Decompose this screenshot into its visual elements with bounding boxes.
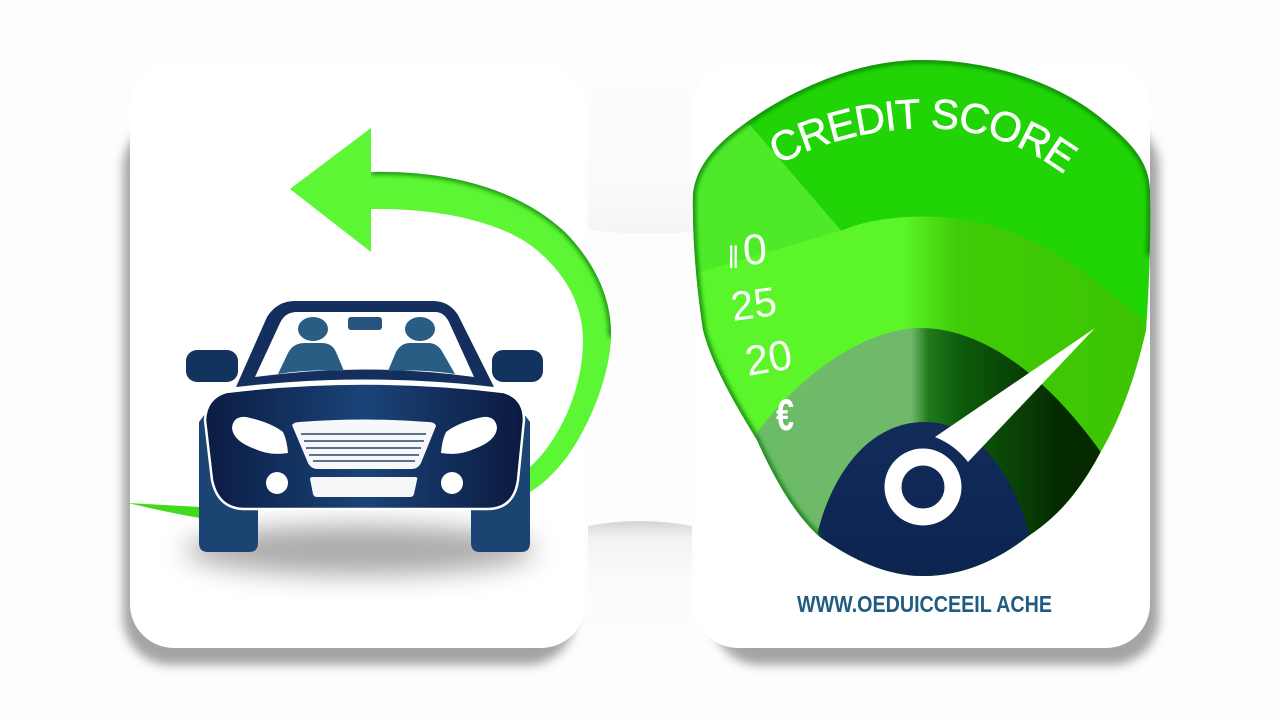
right wheel and fender [471, 414, 530, 552]
arrow head [290, 128, 371, 252]
right fog light [441, 472, 463, 494]
windshield [255, 312, 474, 377]
needle [935, 328, 1095, 462]
credit score gauge [692, 60, 1150, 576]
scale label euro: € [776, 391, 794, 440]
left occupant [278, 317, 344, 374]
left mirror [186, 350, 238, 382]
light wedge [692, 123, 841, 292]
number plate [310, 477, 417, 497]
infographic canvas [117, 60, 1165, 671]
scale tick mark: II [729, 240, 738, 276]
middle upper panel [588, 60, 692, 234]
hub ring [893, 457, 953, 517]
roof frame [236, 301, 494, 387]
right headlight [441, 417, 497, 454]
gauge shield [693, 60, 1150, 576]
grille [292, 420, 436, 469]
gauge hub [817, 422, 1030, 576]
website text: WWW.OEDUICCEEIL ACHE [797, 591, 1052, 617]
left wheel and fender [199, 414, 258, 552]
inner band [754, 328, 1100, 576]
scale label 25: 25 [728, 278, 779, 330]
middle band [690, 217, 1155, 600]
right mirror [492, 350, 543, 382]
shield edge shading [693, 60, 1150, 537]
gauge title: CREDIT SCORE [772, 98, 1078, 174]
right card [694, 62, 1159, 665]
scale label 20: 20 [741, 330, 796, 385]
rear-view mirror [348, 317, 382, 330]
left fog light [266, 472, 288, 494]
right occupant [388, 317, 455, 374]
car body [205, 384, 524, 509]
middle lower panel [588, 521, 692, 640]
arrow tail [128, 503, 200, 518]
left card [123, 62, 585, 665]
left headlight [232, 417, 288, 454]
green return arrow [128, 128, 611, 518]
ground shadow [185, 525, 535, 575]
scale label 0: 0 [741, 225, 769, 275]
arrow arc [371, 172, 611, 492]
car [186, 301, 543, 552]
